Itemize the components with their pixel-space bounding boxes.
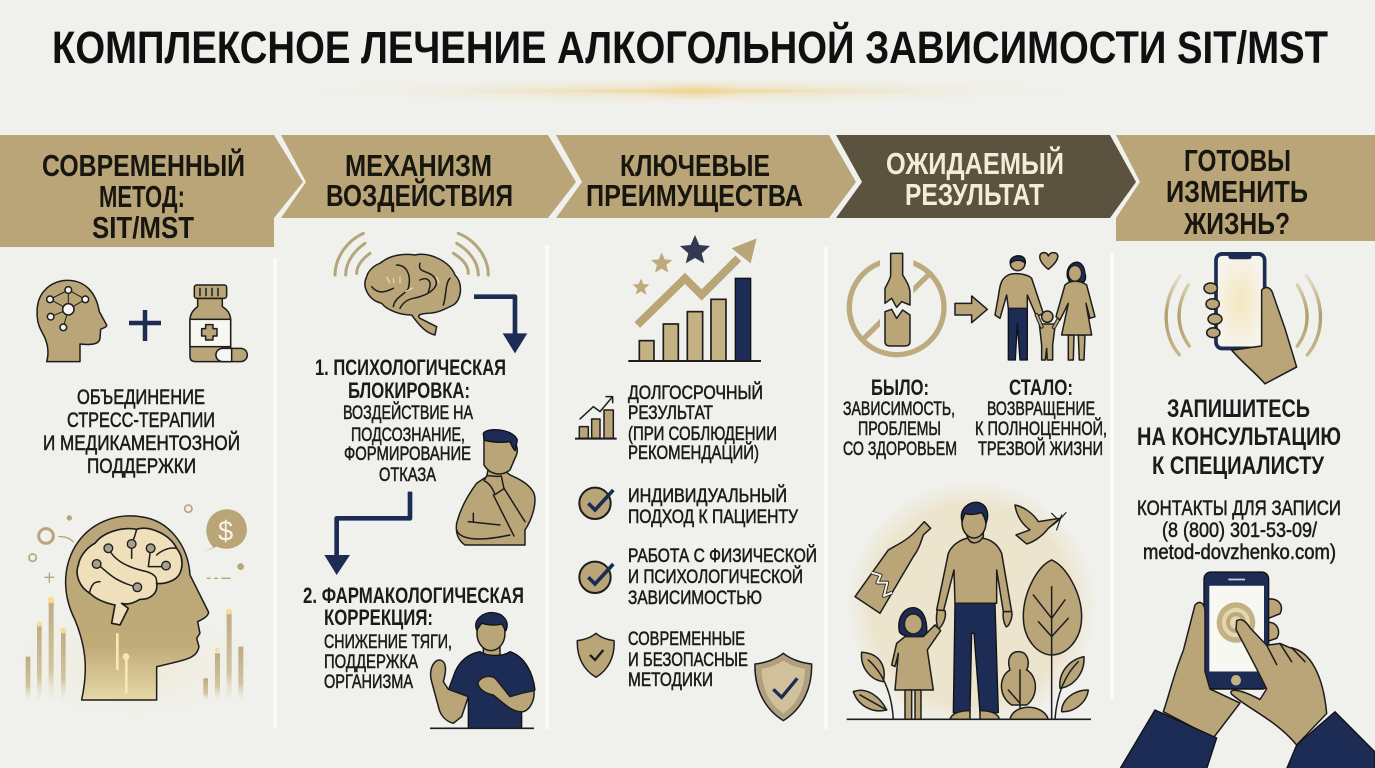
text: after: СТАЛО:: [1009, 375, 1073, 400]
item: individual approach: [579, 483, 798, 528]
icon: brain head with glowing bars: $: [218, 516, 233, 547]
icon: happy family: [995, 253, 1095, 360]
text: description: СТРЕСС-ТЕРАПИИ: [67, 409, 215, 432]
text: sign up: К СПЕЦИАЛИСТУ: [1152, 452, 1324, 480]
text: contacts: (8 (800) 301-53-09/: [1162, 519, 1317, 542]
panel: header 2 механизм: [281, 135, 576, 218]
item: physical and psychological: И ПСИХОЛОГИЧЕСКОЙ: [628, 564, 803, 588]
panel: column 3 benefits: [575, 235, 817, 721]
text: step 2: 2. ФАРМАКОЛОГИЧЕСКАЯ: [303, 583, 524, 608]
item: long-term result: [575, 380, 777, 464]
icon: medicine bottle: [190, 285, 247, 362]
item: long-term result: РЕКОМЕНДАЦИЙ): [628, 440, 759, 464]
icon: brain with waves: [335, 233, 488, 335]
panel: header 1 современный метод: СОВРЕМЕННЫЙ: [42, 147, 245, 183]
text: step 1: 1. ПСИХОЛОГИЧЕСКАЯ: [315, 355, 506, 380]
text: before: ЗАВИСИМОСТЬ,: [843, 398, 955, 420]
panel: column 4 result: [843, 251, 1107, 733]
icon: thinking man: [456, 430, 535, 545]
panel: header 3 преимущества: [556, 135, 856, 218]
icon: hand holding phone: [1166, 254, 1320, 384]
icon: hands tapping phone: [1120, 572, 1375, 768]
text: before: БЫЛО:: [871, 375, 929, 400]
panel: header 1 современный метод: МЕТОД:: [99, 179, 185, 214]
item: long-term result: РЕЗУЛЬТАТ: [628, 402, 713, 424]
icon: brain head with glowing bars: [3, 505, 263, 723]
panel: header 5 готовы: [1116, 135, 1375, 241]
text: step 2: КОРРЕКЦИЯ:: [324, 605, 433, 630]
text: before: ПРОБЛЕМЫ: [858, 418, 941, 440]
icon: plus: [129, 310, 161, 341]
text: after: К ПОЛНОЦЕННОЙ,: [975, 416, 1107, 440]
item: individual approach: ПОДХОД К ПАЦИЕНТУ: [628, 506, 798, 528]
panel: header 5 готовы: ГОТОВЫ: [1184, 143, 1291, 178]
item: long-term result: ДОЛГОСРОЧНЫЙ: [628, 380, 763, 404]
arrow: to step 1: [474, 297, 527, 353]
text: after: ТРЕЗВОЙ ЖИЗНИ: [978, 436, 1103, 460]
text: description: ПОДДЕРЖКИ: [87, 455, 196, 478]
column separators: [273, 245, 1114, 729]
text: sign up: [1137, 395, 1341, 480]
panel: header 3 преимущества: ПРЕИМУЩЕСТВА: [586, 178, 803, 213]
arrow: before to after: [955, 296, 987, 323]
text: after: [975, 375, 1107, 460]
text: description: [43, 386, 240, 478]
panel: header 5 готовы: ИЗМЕНИТЬ: [1166, 174, 1308, 209]
panel: header 3 преимущества: КЛЮЧЕВЫЕ: [620, 148, 770, 183]
text: contacts: metod-dovzhenko.com): [1143, 541, 1336, 564]
text: step 1: ВОЗДЕЙСТВИЕ НА: [343, 400, 473, 424]
icon: prohibited broken bottle: [849, 251, 944, 355]
panel: column 1 method: [3, 280, 263, 723]
text: step 2: ПОДДЕРЖКА: [324, 651, 418, 673]
panel: header 2 механизм: ВОЗДЕЙСТВИЯ: [326, 177, 513, 213]
item: safe methods: [577, 628, 748, 691]
text: step 1: БЛОКИРОВКА:: [348, 378, 470, 403]
item: individual approach: ИНДИВИДУАЛЬНЫЙ: [628, 483, 787, 507]
panel: header 1 современный метод: [0, 135, 303, 247]
panel: header 4 результат: [836, 135, 1136, 218]
chart: growth bars with arrow and stars: [628, 235, 761, 361]
item: physical and psychological: ЗАВИСИМОСТЬЮ: [628, 587, 762, 609]
text: before: СО ЗДОРОВЬЕМ: [843, 438, 957, 460]
panel: column 5 call to action: [1120, 254, 1375, 768]
item: physical and psychological: [579, 543, 817, 609]
item: long-term result: (ПРИ СОБЛЮДЕНИИ: [628, 423, 777, 445]
panel: header 4 результат: ОЖИДАЕМЫЙ: [886, 145, 1064, 181]
panel: header 5 готовы: ЖИЗНЬ?: [1183, 206, 1290, 241]
text: step 1: ПОДСОЗНАНИЕ,: [351, 424, 465, 446]
text: after: ВОЗВРАЩЕНИЕ: [987, 398, 1095, 420]
text: step 1: [315, 355, 506, 486]
arrow: to step 2: [324, 492, 410, 575]
text: description: ОБЪЕДИНЕНИЕ: [77, 386, 205, 409]
text: step 1: ФОРМИРОВАНИЕ: [344, 443, 471, 465]
text: step 2: ОРГАНИЗМА: [324, 671, 413, 693]
illustration: father and daughter in nature: [843, 482, 1100, 733]
text: step 2: [303, 583, 524, 693]
panel: header 1 современный метод: SIT/MST: [92, 210, 194, 245]
item: safe methods: СОВРЕМЕННЫЕ: [628, 628, 745, 650]
icon: large shield: [755, 653, 812, 721]
text: description: И МЕДИКАМЕНТОЗНОЙ: [43, 431, 240, 455]
item: physical and psychological: РАБОТА С ФИЗИЧЕСКОЙ: [628, 543, 817, 567]
panel: header 2 механизм: МЕХАНИЗМ: [345, 148, 492, 183]
panel: column 2 mechanism: [303, 233, 535, 728]
text: contacts: [1137, 497, 1341, 564]
golden glow divider: [280, 77, 1100, 105]
text: step 2: СНИЖЕНИЕ ТЯГИ,: [324, 631, 452, 653]
text: sign up: ЗАПИШИТЕСЬ: [1167, 395, 1310, 423]
panel: header 4 результат: РЕЗУЛЬТАТ: [905, 177, 1044, 212]
item: safe methods: И БЕЗОПАСНЫЕ: [628, 649, 748, 671]
text: before: [843, 375, 957, 460]
text: step 1: ОТКАЗА: [379, 464, 436, 486]
icon: head with network: [37, 280, 107, 362]
item: safe methods: МЕТОДИКИ: [628, 669, 713, 691]
icon: man in navy shirt: [430, 613, 535, 728]
